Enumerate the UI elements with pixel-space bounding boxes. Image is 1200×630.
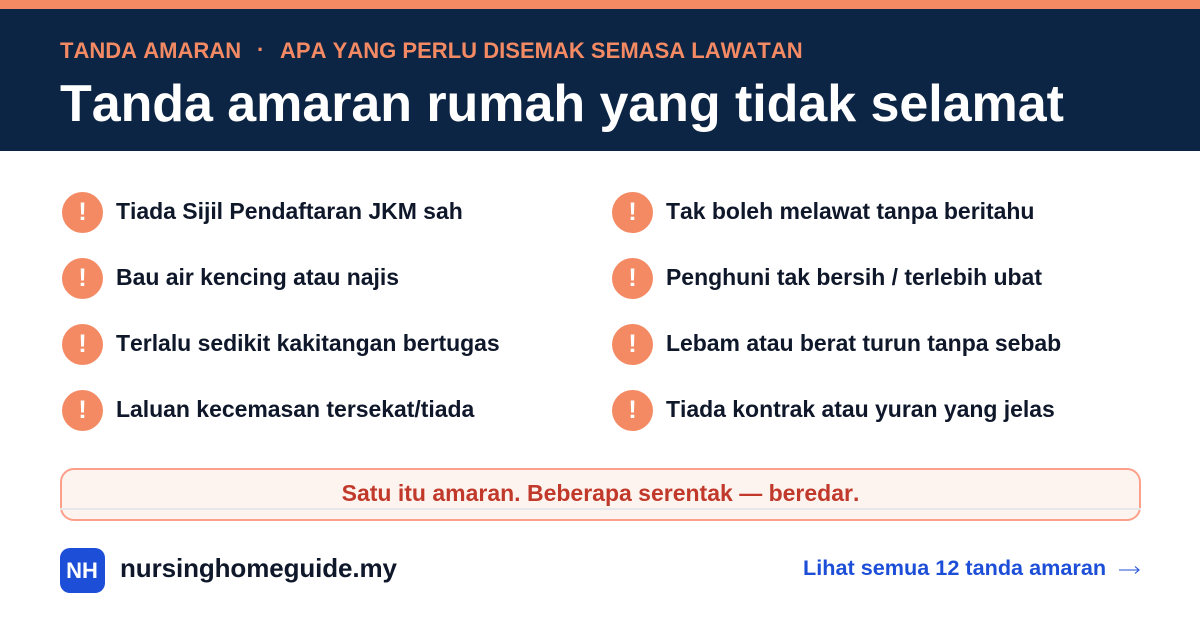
warning item 6 bbox=[612, 258, 1042, 299]
top accent bar bbox=[0, 0, 1200, 9]
warning item 3 bbox=[62, 324, 500, 365]
panel: warning signs list bbox=[62, 192, 1061, 431]
warning item 1 bbox=[62, 192, 463, 233]
callout text: Satu itu amaran. Beberapa serentak — beredar. bbox=[342, 480, 859, 506]
warning item 3: ! bbox=[78, 330, 87, 358]
warning item 5 bbox=[612, 192, 1034, 233]
call to action link: Lihat semua 12 tanda amaran bbox=[803, 555, 1106, 580]
kicker bbox=[60, 37, 803, 63]
warning item 4 bbox=[62, 390, 474, 431]
arrow bbox=[1119, 566, 1140, 574]
site name: nursinghomeguide.my bbox=[120, 553, 397, 583]
warning item 4: ! bbox=[78, 396, 87, 424]
warning item 1: ! bbox=[78, 198, 87, 226]
warning item 2: ! bbox=[78, 264, 87, 292]
warning item 1: Tiada Sijil Pendaftaran JKM sah bbox=[116, 198, 463, 224]
warning item 8 bbox=[612, 390, 1055, 431]
logo badge: NH bbox=[66, 558, 98, 583]
callout divider line bbox=[60, 508, 1141, 510]
warning item 5: ! bbox=[628, 198, 637, 226]
warning item 3: Terlalu sedikit kakitangan bertugas bbox=[116, 330, 500, 356]
warning item 6: Penghuni tak bersih / terlebih ubat bbox=[666, 264, 1042, 290]
warning item 5: Tak boleh melawat tanpa beritahu bbox=[666, 198, 1034, 224]
warning item 6: ! bbox=[628, 264, 637, 292]
logo badge bbox=[60, 548, 105, 593]
kicker part 2: APA YANG PERLU DISEMAK SEMASA LAWATAN bbox=[280, 38, 803, 63]
callout bbox=[60, 468, 1141, 521]
header band bbox=[0, 0, 1200, 151]
kicker separator: · bbox=[257, 37, 264, 62]
warning item 2 bbox=[62, 258, 399, 299]
warning item 7: ! bbox=[628, 330, 637, 358]
warning item 4: Laluan kecemasan tersekat/tiada bbox=[116, 396, 474, 422]
warning item 8: ! bbox=[628, 396, 637, 424]
warning item 8: Tiada kontrak atau yuran yang jelas bbox=[666, 396, 1055, 422]
warning item 2: Bau air kencing atau najis bbox=[116, 264, 399, 290]
warning item 7: Lebam atau berat turun tanpa sebab bbox=[666, 330, 1061, 356]
warning item 7 bbox=[612, 324, 1061, 365]
kicker part 1: TANDA AMARAN bbox=[60, 38, 241, 63]
title: Tanda amaran rumah yang tidak selamat bbox=[60, 75, 1064, 133]
